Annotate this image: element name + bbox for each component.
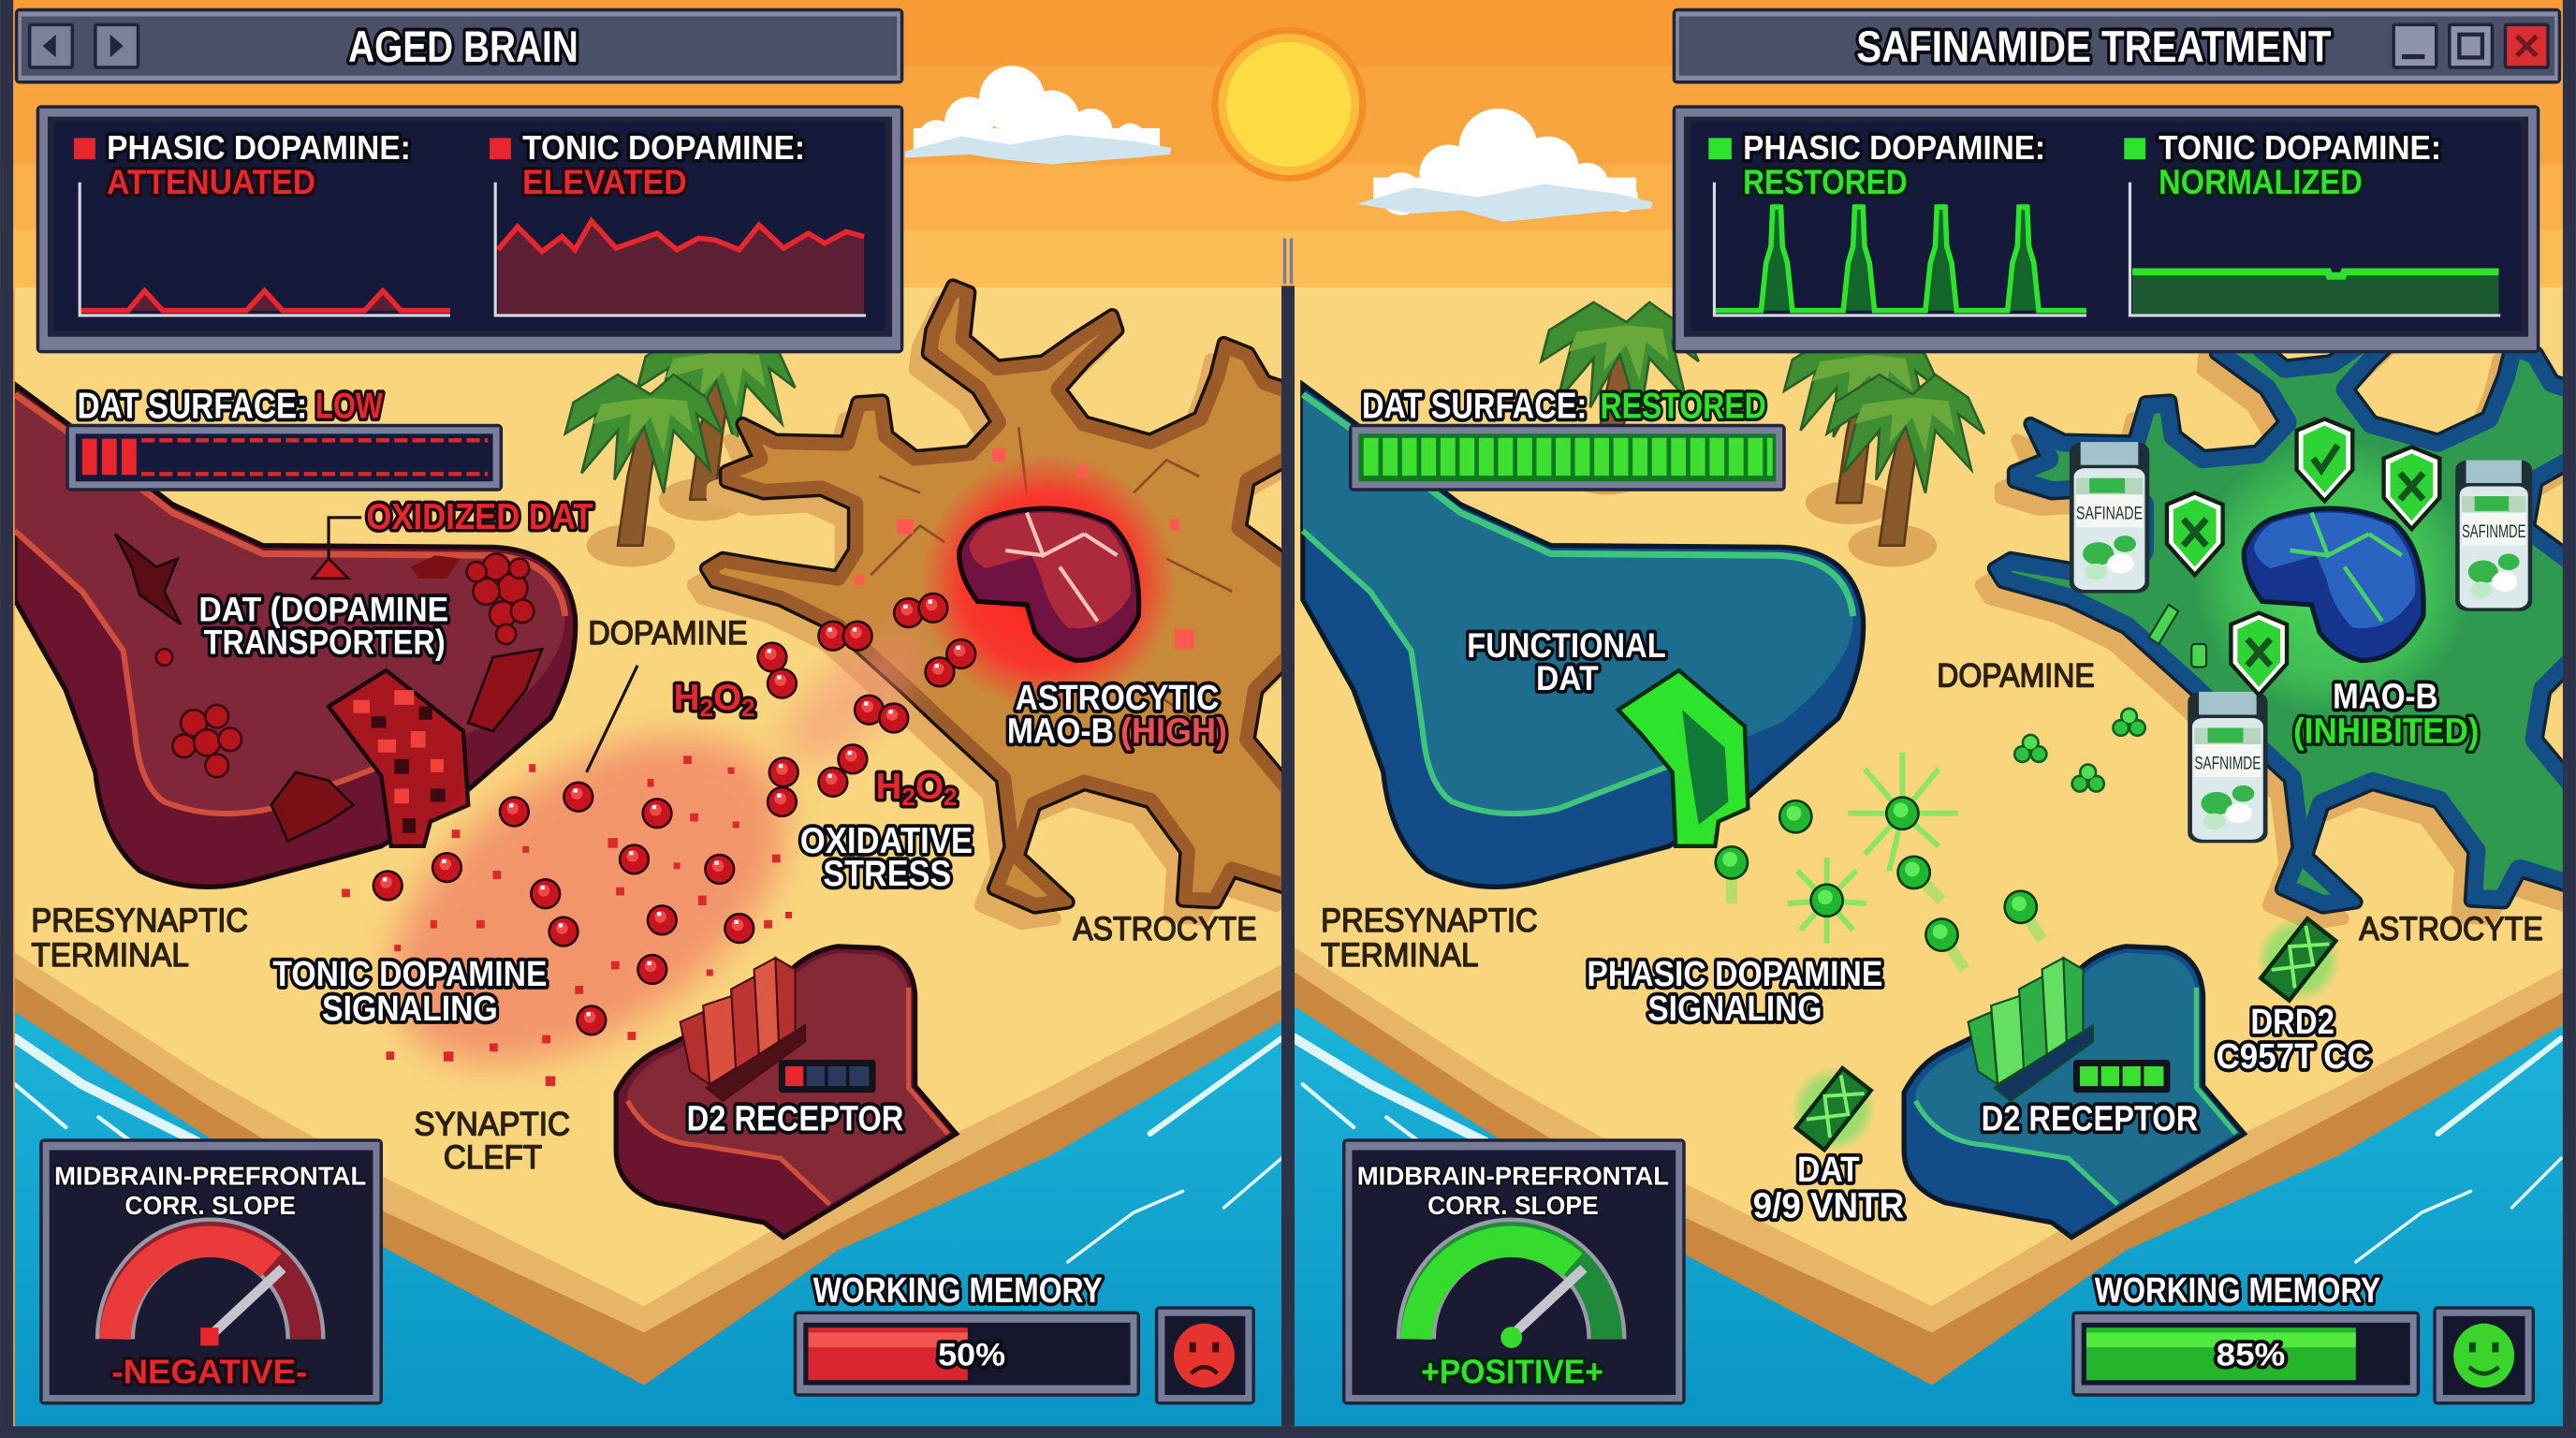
icon: DRD2 gene [2256,917,2341,1003]
tonic dopamine signaling label: SIGNALING [322,989,498,1028]
red scatter particles [342,756,792,1086]
panel: negative correlation gauge [39,1138,383,1405]
DAT label [198,590,448,662]
oxidized DAT label [329,497,593,559]
tonic dopamine signaling label: TONIC DOPAMINE [272,954,547,993]
safinamide bottle 1: SAFINADE [2076,503,2143,523]
tonic dopamine signaling label [272,954,547,1028]
safinamide bottle 3 [2188,692,2268,843]
panel: negative correlation gauge: MIDBRAIN-PREFRONTAL [54,1161,366,1190]
water [0,986,1288,1430]
functional DAT channel [1618,670,1748,846]
presynaptic terminal [1303,385,1864,887]
forward button [94,23,139,69]
panel: aged dopamine charts [37,105,903,353]
oxidative stress label [800,821,973,894]
icon: left cloud [905,66,1171,165]
red sparks on astrocyte [855,448,1194,649]
astrocytic MAO-B label: ASTROCYTIC [1016,678,1219,717]
palm trees [1541,302,1984,566]
astrocyte label left: ASTROCYTE [1073,911,1257,947]
oxidative stress label: STRESS [823,854,951,894]
icon: happy face [2433,1306,2535,1405]
maximize button [2448,23,2494,69]
tonic label [490,128,805,201]
DAT surface low meter: LOW [315,387,383,427]
DAT surface low meter [66,387,503,492]
astrocyte [694,286,1290,923]
dopamine particles [1714,708,2146,952]
sky background [0,0,2576,289]
H2O2 label upper: 2 [700,694,713,722]
safinamide bottle 1 [2070,442,2149,594]
presynaptic terminal label left [31,902,248,974]
foam [1295,1038,2561,1262]
DRD2 label: DRD2 [2250,1002,2334,1041]
presynaptic terminal label right: TERMINAL [1321,937,1479,974]
icon: DAT gene [1791,1066,1876,1152]
H2O2 label lower: O [915,767,944,807]
H2O2 label lower: H [875,767,901,807]
H2O2 label upper: O [713,678,741,718]
sand [1295,287,2563,920]
phasic chart [1714,183,2086,315]
tonic label: TONIC DOPAMINE: [2159,128,2441,167]
MAO-B inhibited label: MAO-B [2333,676,2438,715]
close button [2504,23,2550,69]
icon: right cloud [1357,109,1653,222]
MAO-B inhibited label: (INHIBITED) [2293,711,2479,750]
astrocyte label right: ASTROCYTE [2359,911,2543,947]
astrocyte [1982,286,2576,923]
icon: sad face [1155,1306,1255,1405]
H2O2 label upper: 2 [741,694,755,722]
gauge [115,1238,305,1345]
synaptic cleft label [414,1107,570,1176]
astrocytic MAO-B label: MAO-B [1007,711,1114,750]
dopamine label left: DOPAMINE [588,615,748,652]
beach edge [1288,920,2576,1385]
palm trees [565,329,795,566]
presynaptic terminal label left: TERMINAL [31,937,189,974]
panel: negative correlation gauge: -NEGATIVE- [111,1353,307,1391]
oxidative stress label: OXIDATIVE [800,821,973,861]
panel: negative correlation gauge: CORR. SLOPE [124,1191,296,1220]
panel: positive correlation gauge [1342,1138,1686,1405]
phasic label: ATTENUATED [107,163,315,201]
phasic label [1708,128,2045,201]
H2O2 label upper: H [674,678,700,718]
MAO-B inhibited organ [2244,508,2423,661]
D2 receptor columns [681,958,805,1101]
DRD2 label: C957T CC [2217,1036,2371,1076]
working memory 85 percent [2071,1270,2420,1397]
right scene: treatment beach [1288,286,2576,1430]
DRD2 label [2217,1002,2371,1076]
synaptic cleft label: CLEFT [444,1139,542,1176]
MAO-B high organ [959,508,1139,661]
panel: positive correlation gauge: +POSITIVE+ [1421,1353,1603,1391]
DAT surface low meter: DAT SURFACE: [78,387,307,427]
synaptic cleft label: SYNAPTIC [414,1107,570,1143]
icon: sun [1211,27,1366,182]
tonic label [2124,128,2441,201]
safinamide bottle 3: SAFNIMDE [2194,753,2261,773]
DAT VNTR label [1753,1150,1904,1225]
oxidized DAT label: OXIDIZED DAT [366,497,593,537]
DAT surface restored meter: RESTORED [1600,387,1766,427]
MAO-B inhibited glow [2203,450,2459,708]
beach edge [0,920,1288,1385]
phasic label: RESTORED [1743,163,1908,201]
dopamine burst rays [1732,753,2042,969]
astrocytic MAO-B label: (HIGH) [1120,711,1227,750]
phasic dopamine signaling label: PHASIC DOPAMINE [1587,954,1882,993]
sand [0,287,1288,1010]
D2 receptor label left: D2 RECEPTOR [687,1098,903,1137]
title bar: safinamide treatment [1673,8,2561,84]
panel: positive correlation gauge: CORR. SLOPE [1427,1191,1599,1220]
DAT VNTR label: DAT [1797,1150,1860,1189]
phasic dopamine signaling label: SIGNALING [1647,989,1822,1028]
inhibitor fragments [2149,605,2206,668]
working memory 85 percent: 85% [2217,1337,2285,1372]
D2 receptor meter [779,1060,875,1093]
tonic chart [2130,183,2500,315]
D2 receptor terminal [616,946,956,1238]
tonic label: ELEVATED [522,163,687,201]
safinamide bottle 2 [2455,460,2532,611]
broken DAT channel [329,670,468,846]
H2O2 label lower: 2 [901,783,915,811]
functional DAT label [1467,626,1666,697]
dopamine label left [587,615,748,772]
left scene: aged brain beach [0,286,1290,1430]
DAT VNTR label: 9/9 VNTR [1753,1185,1904,1225]
D2 receptor terminal [1904,946,2244,1238]
foam [15,1038,1281,1262]
MAO-B high glow [920,453,1177,710]
DAT label: TRANSPORTER) [204,624,446,662]
title bar: aged brain [15,8,903,84]
working memory 50 percent [794,1270,1140,1397]
DAT surface restored meter [1349,387,1786,492]
gauge [1416,1238,1606,1348]
phasic chart [80,183,450,315]
tonic chart [495,183,866,315]
phasic dopamine signaling label [1587,954,1882,1028]
panel: positive correlation gauge: MIDBRAIN-PREFRONTAL [1357,1161,1669,1190]
water [1288,986,2576,1430]
functional DAT label: DAT [1536,659,1599,697]
H2O2 label lower: 2 [944,783,958,811]
D2 receptor columns [1969,958,2093,1101]
panel: treatment dopamine charts [1673,105,2539,353]
astrocytic MAO-B label [1007,678,1227,750]
presynaptic terminal label left: PRESYNAPTIC [31,902,248,939]
phasic label: PHASIC DOPAMINE: [107,128,411,167]
dopamine particles [373,593,976,1036]
phasic label: PHASIC DOPAMINE: [1743,128,2045,167]
DAT label: DAT (DOPAMINE [198,590,448,628]
title text: AGED BRAIN [348,22,578,72]
functional DAT label: FUNCTIONAL [1467,626,1666,665]
haze near astrocyte [773,625,931,774]
D2 receptor meter [2073,1060,2170,1093]
D2 receptor label right: D2 RECEPTOR [1982,1098,2198,1137]
red haze: tonic dopamine [373,718,804,1082]
DAT surface restored meter: DAT SURFACE: [1362,387,1587,427]
working memory 50 percent: WORKING MEMORY [813,1270,1103,1310]
presynaptic terminal label right: PRESYNAPTIC [1321,902,1538,939]
back button [28,23,74,69]
tonic label: TONIC DOPAMINE: [522,128,805,167]
oxidized DAT clusters [115,534,542,842]
presynaptic terminal [15,385,576,887]
inhibitor shields [2167,419,2439,695]
presynaptic terminal label right [1321,902,1538,974]
MAO-B inhibited label [2293,676,2479,750]
phasic label [74,128,411,201]
working memory 85 percent: WORKING MEMORY [2095,1270,2380,1310]
dopamine label right: DOPAMINE [1937,658,2095,695]
title text: SAFINAMIDE TREATMENT [1856,22,2331,72]
minimize button [2392,23,2438,69]
tonic label: NORMALIZED [2159,163,2363,201]
working memory 50 percent: 50% [938,1337,1005,1372]
